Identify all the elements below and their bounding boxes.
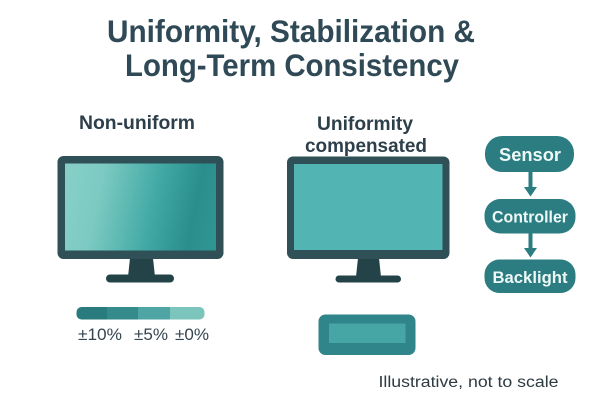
flow: backlight bbox=[484, 260, 576, 293]
compensation module bbox=[318, 314, 416, 355]
monitor: compensated bbox=[287, 156, 450, 282]
scale labels bbox=[78, 325, 209, 344]
arrow: controller to backlight bbox=[524, 233, 537, 258]
title: Long-Term Consistency bbox=[125, 47, 459, 83]
scale bar bbox=[76, 307, 204, 320]
note: Illustrative, not to scale bbox=[378, 374, 558, 391]
monitor: non-uniform bbox=[58, 156, 224, 282]
heading: uniformity compensated: compensated bbox=[305, 136, 427, 157]
arrow: sensor to controller bbox=[524, 172, 537, 196]
flow: controller: Controller bbox=[492, 208, 569, 226]
heading: uniformity compensated: Uniformity bbox=[317, 114, 413, 135]
scale labels: ±5% bbox=[134, 325, 168, 344]
flow: sensor: Sensor bbox=[499, 145, 561, 165]
flow: sensor bbox=[485, 136, 574, 172]
flow: controller bbox=[484, 199, 576, 234]
screen with gradient bbox=[65, 164, 216, 250]
title bbox=[107, 13, 475, 83]
heading: non-uniform: Non-uniform bbox=[79, 113, 195, 134]
scale labels: ±0% bbox=[175, 325, 209, 344]
flow: backlight: Backlight bbox=[492, 268, 568, 287]
scale labels: ±10% bbox=[78, 325, 122, 344]
heading: uniformity compensated bbox=[305, 114, 427, 157]
title: Uniformity, Stabilization & bbox=[107, 13, 475, 49]
screen flat bbox=[294, 164, 442, 250]
